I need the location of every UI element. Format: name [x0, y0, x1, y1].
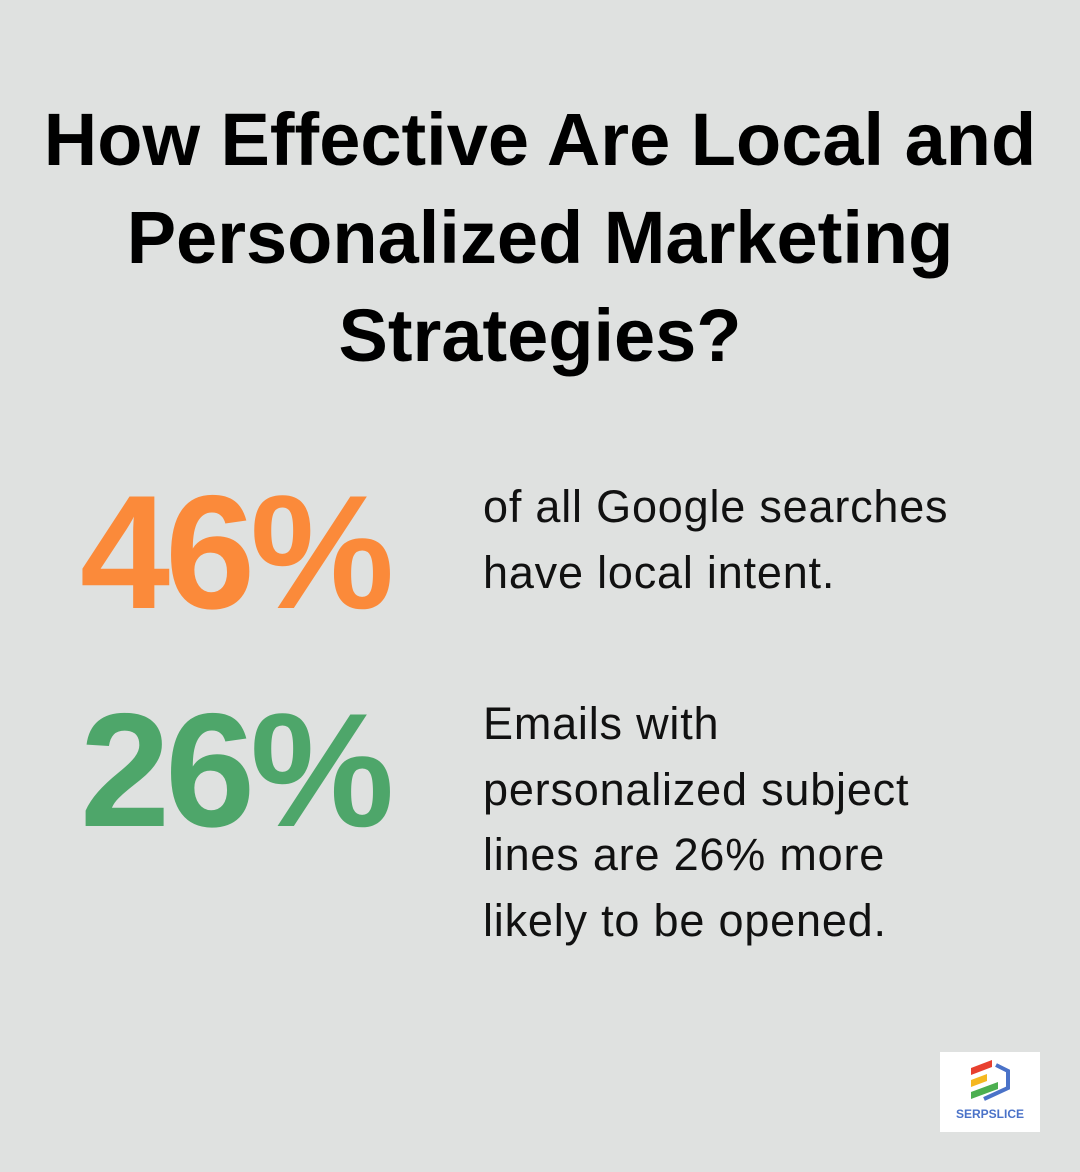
stat: 26%: 26% — [80, 680, 389, 861]
stat text: personalized emails: personalized subject — [483, 764, 909, 814]
title: Personalized Marketing — [127, 196, 953, 279]
title: How Effective Are Local and — [44, 98, 1036, 181]
title — [44, 98, 1036, 377]
stat text: local intent: have local intent. — [483, 546, 835, 598]
stat text: personalized emails — [483, 698, 909, 946]
stat text: personalized emails: lines are 26% more — [483, 829, 885, 880]
stat text: local intent: of all Google searches — [483, 481, 948, 532]
stat text: personalized emails: likely to be opened. — [483, 894, 887, 946]
stat: 46%: 46% — [80, 462, 389, 643]
title: Strategies? — [338, 294, 742, 377]
stat text: local intent — [483, 481, 948, 598]
logo: serpslice — [940, 1052, 1040, 1132]
stat text: personalized emails: Emails with — [483, 698, 719, 749]
logo: serpslice: SERPSLICE — [956, 1107, 1024, 1121]
